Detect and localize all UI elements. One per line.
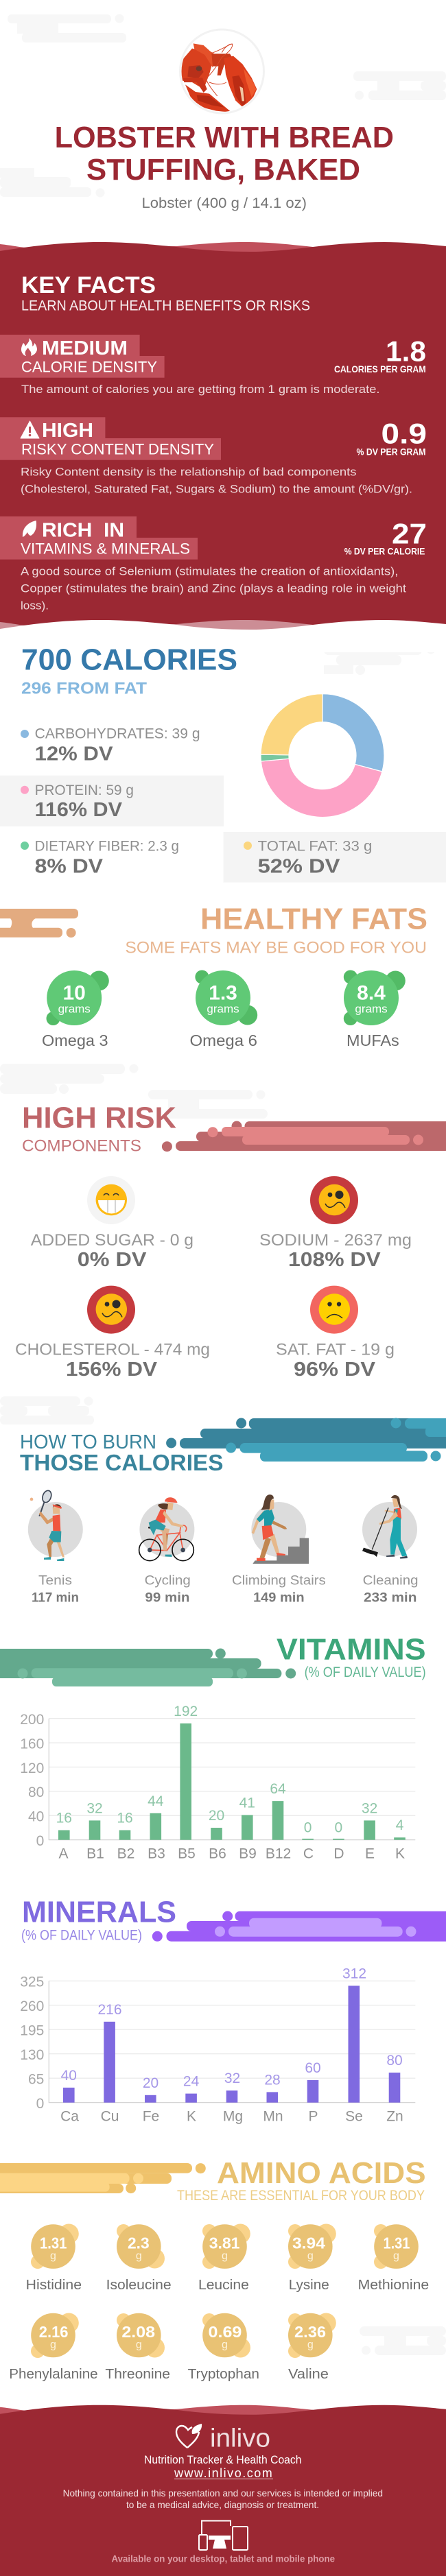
metric: omega 6: grams [207, 1003, 239, 1016]
bar chart: vitamins: 200 [20, 1712, 44, 1728]
bar chart: vitamins: 80 [28, 1785, 44, 1800]
website: www.inlivo.com [174, 2466, 272, 2480]
metric: omega 6: 1.3 [209, 981, 237, 1004]
amino: threonine: Threonine [105, 2367, 170, 2382]
amino: methionine: 1.31 [383, 2234, 410, 2252]
bar chart: minerals: K [187, 2108, 196, 2124]
activity: cycling: Cycling [145, 1573, 191, 1588]
amino: isoleucine: g [136, 2250, 142, 2262]
decorative bar: amino acids [0, 2163, 206, 2193]
amino: histidine: Histidine [26, 2278, 82, 2293]
bar chart: vitamins: 32 [86, 1800, 103, 1816]
heading: vitamins: (% OF DAILY VALUE) [305, 1665, 426, 1680]
risk item: saturated fat [276, 1286, 395, 1381]
heading: healthy fats: HEALTHY FATS [200, 902, 427, 935]
metric: mufas: 8.4 [357, 981, 386, 1004]
bar chart: vitamins [20, 1704, 415, 1861]
risk item: added sugar: 0% DV [78, 1249, 147, 1271]
bar chart: vitamins: 40 [28, 1809, 44, 1825]
bar chart: minerals: Mg [223, 2108, 243, 2124]
vitamins description: Copper (stimulates the brain) and Zinc (plays a leading role in weight [21, 582, 406, 595]
amino: tryptophan: g [222, 2339, 228, 2351]
risk item: saturated fat: 96% DV [294, 1359, 376, 1381]
heading: high risk: COMPONENTS [22, 1136, 141, 1155]
activity: cleaning: 233 min [364, 1591, 416, 1605]
amino: isoleucine: 2.3 [128, 2234, 150, 2252]
bar chart: vitamins: 16 [117, 1811, 133, 1826]
vitamins description [21, 564, 406, 612]
disclaimer [63, 2488, 383, 2510]
bar chart: vitamins: C [303, 1846, 314, 1861]
amino: leucine [198, 2223, 250, 2293]
heading: vitamins: VITAMINS [277, 1632, 426, 1666]
legend: macronutrients: TOTAL FAT: 33 g [258, 839, 372, 855]
decorative bar: minerals [152, 1911, 446, 1942]
bar chart: minerals: 325 [20, 1975, 44, 1990]
amino: leucine: Leucine [198, 2278, 249, 2293]
heading: minerals: MINERALS [22, 1895, 176, 1929]
legend: macronutrients: CARBOHYDRATES: 39 g [35, 726, 200, 742]
bar chart: vitamins: B12 [266, 1846, 291, 1861]
amino: phenylalanine: g [50, 2339, 56, 2351]
amino: isoleucine: Isoleucine [106, 2278, 172, 2293]
bar chart: minerals: 0 [36, 2096, 44, 2112]
decorative bar: healthy fats [0, 909, 78, 938]
bar chart: vitamins: A [58, 1846, 69, 1861]
bar chart: minerals: Ca [60, 2108, 79, 2124]
bar chart: vitamins: 64 [270, 1781, 286, 1797]
bar chart: minerals: Mn [263, 2108, 283, 2124]
bar chart: vitamins: 0 [335, 1820, 342, 1836]
risky content description: Risky Content density is the relationship of bad components [21, 465, 357, 478]
calorie density description: The amount of calories you are getting from 1 gram is moderate. [21, 383, 380, 396]
heading: calories: 700 CALORIES [21, 643, 237, 677]
activity: climbing stairs: Climbing Stairs [232, 1573, 326, 1588]
amino: phenylalanine: Phenylalanine [9, 2367, 98, 2382]
legend: macronutrients: 12% DV [35, 743, 113, 765]
bar chart: minerals: 28 [264, 2072, 281, 2088]
bar chart: minerals: 60 [305, 2060, 321, 2076]
icon: cyclist [139, 1497, 193, 1561]
bar chart: minerals: 312 [342, 1966, 366, 1981]
icon: devices [199, 2521, 248, 2550]
bar chart: vitamins: 120 [20, 1761, 44, 1776]
heading: amino acids: AMINO ACIDS [217, 2156, 426, 2190]
legend: macronutrients: PROTEIN: 59 g [35, 783, 134, 798]
heading: calories: 296 FROM FAT [21, 680, 147, 698]
legend: macronutrients: DIETARY FIBER: 2.3 g [35, 839, 179, 855]
activity: cycling [139, 1497, 194, 1605]
key facts heading [21, 272, 310, 314]
key facts heading: LEARN ABOUT HEALTH BENEFITS OR RISKS [21, 298, 310, 314]
amino: valine: g [307, 2339, 314, 2351]
brand name: inlivo [210, 2424, 270, 2453]
bar chart: vitamins: B9 [239, 1846, 257, 1861]
heading: how to burn: HOW TO BURN [20, 1431, 156, 1453]
bar chart: vitamins: 20 [209, 1808, 224, 1824]
icon: tennis player [30, 1489, 64, 1561]
icon: leaf [23, 521, 36, 537]
bar chart: minerals: 32 [224, 2071, 240, 2086]
bar chart: vitamins: B6 [209, 1846, 226, 1861]
amino: lysine: Lysine [289, 2278, 329, 2293]
activity: climbing stairs: 149 min [253, 1591, 305, 1605]
risky content description [21, 465, 412, 495]
heading: how to burn [20, 1431, 224, 1475]
metric: omega 3: grams [58, 1003, 91, 1016]
medium calorie density badge: MEDIUM [42, 337, 128, 359]
risk item: sodium: SODIUM - 2637 mg [259, 1231, 412, 1250]
activity: cleaning [362, 1495, 419, 1605]
serving size subtitle: Lobster (400 g / 14.1 oz) [141, 195, 307, 211]
amino: lysine: g [307, 2250, 314, 2262]
amino: threonine: 2.08 [121, 2323, 155, 2341]
bar chart: vitamins: 0 [304, 1820, 312, 1836]
metric: omega 6: Omega 6 [189, 1031, 257, 1049]
bar chart: minerals: Fe [143, 2108, 159, 2124]
amino: methionine: g [393, 2250, 399, 2262]
icon: person sweeping [362, 1495, 408, 1559]
legend: macronutrients [0, 726, 446, 883]
bar chart: vitamins: B5 [178, 1846, 196, 1861]
bar chart: vitamins: 32 [362, 1800, 377, 1816]
bar chart: minerals: 216 [97, 2002, 122, 2018]
high risky content badge: RISKY CONTENT DENSITY [21, 441, 214, 458]
risky content value: % DV PER GRAM [357, 446, 425, 457]
risk item: cholesterol [15, 1286, 210, 1381]
vitamins description: A good source of Selenium (stimulates the creation of antioxidants), [21, 564, 398, 577]
vitamins description: loss). [21, 599, 49, 612]
amino: leucine: 3.81 [209, 2234, 240, 2252]
title: STUFFING, BAKED [86, 153, 360, 187]
bar chart: vitamins: 160 [20, 1736, 44, 1752]
amino: histidine [26, 2223, 82, 2293]
high risky content badge: HIGH [42, 420, 93, 442]
bar chart: vitamins: D [333, 1846, 344, 1861]
heading: healthy fats: SOME FATS MAY BE GOOD FOR YOU [125, 938, 427, 957]
heading: calories [21, 643, 237, 698]
risk item: added sugar: ADDED SUGAR - 0 g [31, 1231, 193, 1250]
risky content value: 0.9 [382, 418, 427, 450]
activity: tennis: Tenis [38, 1573, 72, 1588]
bar chart: minerals: Cu [101, 2108, 119, 2124]
heading: high risk [22, 1101, 176, 1155]
risky content description: (Cholesterol, Saturated Fat, Sugars & Sodium) to the amount (%DV/gr). [21, 482, 412, 495]
panel: key facts [0, 242, 446, 652]
icon: inlivo heart logo [176, 2424, 202, 2448]
heading: healthy fats [125, 902, 427, 957]
rich in vitamins badge: RICH IN [42, 519, 124, 541]
calorie density value: 1.8 [386, 335, 426, 368]
donut chart [261, 694, 384, 818]
heading: minerals: (% OF DAILY VALUE) [21, 1927, 142, 1943]
activity: tennis: 117 min [32, 1591, 79, 1605]
risk item: sodium [259, 1176, 412, 1271]
icon: stair climber [252, 1494, 309, 1564]
activity: cleaning: Cleaning [363, 1573, 419, 1588]
metric: mufas: grams [355, 1003, 388, 1016]
key facts heading: KEY FACTS [21, 272, 156, 298]
heading: minerals [21, 1895, 176, 1943]
bar chart: minerals [20, 1966, 415, 2124]
icon: lobster photo in circle [180, 29, 263, 113]
bar chart: vitamins: B1 [86, 1846, 104, 1861]
bar chart: vitamins: 192 [174, 1704, 198, 1719]
icon: warning triangle [21, 421, 39, 438]
bar chart: vitamins: 16 [56, 1811, 72, 1826]
risk item: cholesterol: 156% DV [66, 1359, 158, 1381]
vitamins density value [344, 517, 427, 556]
heading: how to burn: THOSE CALORIES [20, 1450, 224, 1475]
amino: valine [288, 2313, 336, 2382]
calorie density value [334, 335, 426, 374]
amino: lysine [288, 2223, 336, 2293]
decorative bar: high risk [162, 1121, 446, 1152]
bar chart: minerals: 80 [386, 2053, 403, 2068]
bar chart: minerals: Zn [386, 2108, 403, 2124]
tagline: Nutrition Tracker & Health Coach [144, 2453, 302, 2466]
vitamins density value: % DV PER CALORIE [344, 546, 425, 556]
bar chart: minerals: Se [345, 2108, 363, 2124]
bar chart: minerals: 130 [20, 2047, 44, 2063]
bar chart: minerals: 24 [183, 2074, 200, 2090]
calorie density value: CALORIES PER GRAM [334, 364, 426, 374]
risk item: sodium: 108% DV [288, 1249, 381, 1271]
medium calorie density badge: CALORIE DENSITY [21, 359, 157, 376]
metric: mufas [344, 970, 406, 1049]
bar chart: vitamins: 41 [239, 1795, 255, 1811]
bar chart: minerals: P [308, 2108, 318, 2124]
footer panel [0, 2405, 446, 2576]
high risky content badge [0, 417, 221, 460]
heading: amino acids [177, 2156, 426, 2204]
legend: macronutrients: 8% DV [35, 855, 104, 877]
amino: lysine: 3.94 [292, 2234, 325, 2252]
amino: phenylalanine: 2.16 [39, 2323, 69, 2341]
heading: high risk: HIGH RISK [22, 1101, 176, 1134]
bar chart: minerals: 20 [143, 2075, 159, 2091]
amino: tryptophan [188, 2313, 259, 2382]
activity: cycling: 99 min [145, 1591, 189, 1605]
amino: tryptophan: Tryptophan [188, 2367, 259, 2382]
amino: isoleucine [106, 2224, 172, 2293]
bar chart: vitamins: K [395, 1846, 405, 1861]
bar chart: minerals: 40 [61, 2068, 77, 2084]
metric: omega 3 [42, 970, 109, 1049]
rich in vitamins badge [0, 516, 198, 560]
bar chart: vitamins: 44 [148, 1793, 164, 1809]
amino: threonine [105, 2313, 170, 2382]
risk item: cholesterol: CHOLESTEROL - 474 mg [15, 1341, 210, 1359]
risk item: saturated fat: SAT. FAT - 19 g [276, 1341, 395, 1359]
metric: omega 6 [189, 970, 257, 1049]
metric: omega 3: Omega 3 [42, 1031, 108, 1049]
bar chart: minerals: 260 [20, 1999, 44, 2014]
amino: valine: Valine [288, 2367, 329, 2382]
bar chart: minerals: 65 [28, 2071, 44, 2088]
heading: vitamins [277, 1632, 426, 1680]
metric: omega 3: 10 [63, 981, 86, 1004]
medium calorie density badge [0, 335, 165, 378]
amino: tryptophan: 0.69 [209, 2323, 242, 2341]
amino: histidine: 1.31 [40, 2234, 67, 2252]
bar chart: minerals: 195 [20, 2023, 44, 2038]
legend: macronutrients: 52% DV [258, 855, 340, 877]
amino: methionine: Methionine [358, 2278, 429, 2293]
disclaimer: Nothing contained in this presentation and our services is intended or implied [63, 2488, 383, 2499]
activity: climbing stairs [232, 1494, 326, 1605]
amino: leucine: g [222, 2250, 228, 2262]
vitamins density value: 27 [392, 517, 427, 549]
amino: threonine: g [136, 2339, 142, 2351]
amino: histidine: g [50, 2250, 56, 2262]
risky content value [357, 418, 427, 457]
title: LOBSTER WITH BREAD [55, 121, 394, 154]
bar chart: vitamins: E [365, 1846, 375, 1861]
risk item: added sugar [31, 1176, 193, 1271]
rich in vitamins badge: VITAMINS & MINERALS [21, 540, 190, 558]
bar chart: vitamins: 4 [396, 1817, 404, 1833]
availability note: Available on your desktop, tablet and mobile phone [111, 2553, 335, 2564]
amino: phenylalanine [9, 2313, 98, 2382]
title [55, 121, 394, 187]
amino: methionine [358, 2224, 429, 2293]
amino: valine: 2.36 [294, 2323, 326, 2341]
bar chart: vitamins: B3 [148, 1846, 165, 1861]
metric: mufas: MUFAs [347, 1031, 399, 1049]
decorative bar: burn calories [166, 1418, 446, 1462]
disclaimer: to be a medical advice, diagnosis or treatment. [126, 2499, 319, 2510]
bar chart: vitamins: B2 [117, 1846, 134, 1861]
legend: macronutrients: 116% DV [35, 799, 123, 821]
bar chart: vitamins: 0 [36, 1833, 44, 1849]
activity: tennis [28, 1489, 83, 1605]
icon: flame [21, 338, 37, 356]
decorative bar: vitamins [0, 1649, 296, 1686]
